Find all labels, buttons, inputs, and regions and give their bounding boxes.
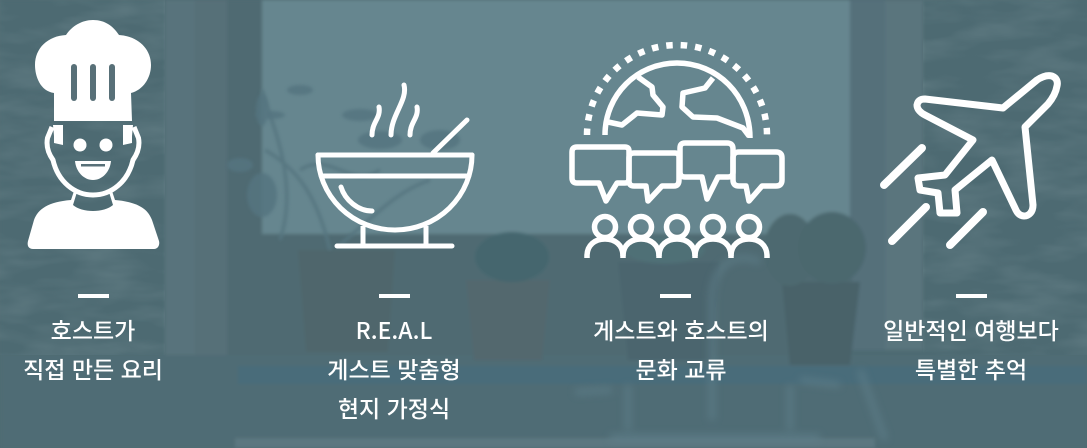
caption text: 게스트와 호스트의 bbox=[593, 312, 769, 346]
caption text bbox=[23, 312, 163, 385]
caption text: 특별한 추억 bbox=[915, 351, 1027, 385]
caption: cultural exchange bbox=[593, 294, 769, 385]
caption: special memories bbox=[883, 294, 1059, 385]
chef face bbox=[47, 125, 139, 195]
chef hat bbox=[35, 20, 151, 121]
caption text: 일반적인 여행보다 bbox=[883, 312, 1059, 346]
caption dash bbox=[956, 294, 986, 298]
speech bubbles bbox=[572, 143, 782, 201]
pots bbox=[298, 250, 395, 352]
caption text: 직접 만든 요리 bbox=[23, 351, 163, 385]
caption dash bbox=[660, 294, 691, 298]
stone wall texture left bbox=[0, 0, 165, 355]
caption dash bbox=[78, 294, 108, 298]
caption text: R.E.A.L bbox=[356, 312, 432, 346]
caption: real home meal bbox=[327, 294, 461, 424]
plant branches bbox=[262, 90, 430, 250]
caption: chef bbox=[23, 294, 163, 385]
caption text: 문화 교류 bbox=[635, 351, 727, 385]
plant leaves bbox=[227, 85, 460, 217]
caption text bbox=[327, 312, 461, 424]
caption text: 현지 가정식 bbox=[338, 390, 450, 424]
chef shoulders bbox=[28, 191, 159, 249]
caption text bbox=[883, 312, 1059, 385]
audience people bbox=[587, 216, 767, 258]
globe bbox=[587, 45, 767, 138]
caption text: 게스트 맞춤형 bbox=[327, 351, 461, 385]
faucet and taps bbox=[575, 258, 885, 440]
caption text: 호스트가 bbox=[51, 312, 135, 346]
stone wall texture right bbox=[923, 0, 1087, 355]
caption dash bbox=[378, 294, 410, 298]
cacti bbox=[475, 232, 549, 282]
caption text bbox=[593, 312, 769, 385]
